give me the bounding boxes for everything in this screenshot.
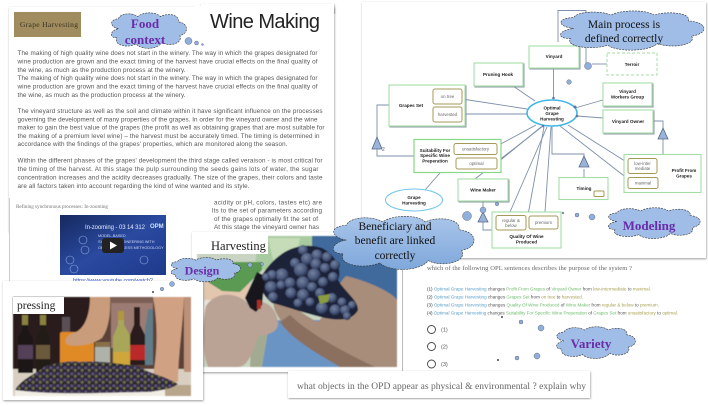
process: optimal grape harvesting [527, 100, 577, 126]
diagram links [377, 10, 663, 230]
object: profit from grapes: maximal [635, 180, 651, 186]
object: grapes set [389, 85, 465, 126]
text block: article paragraphs: of the grapes optimally fit the set of [214, 216, 318, 223]
video thumbnail [60, 215, 166, 275]
text block: article paragraphs: concentration increases and the acidity decreases gradually. The size of the grapes, their colors and taste [18, 174, 323, 182]
object: vinyard owner [603, 110, 653, 133]
heading: grape harvesting label: Grape Harvesting [20, 20, 78, 29]
object: vinyard [529, 46, 579, 68]
text block: article paragraphs: At this stage the vineyard owner has [214, 224, 319, 231]
cloud: main process is defined correctly: Main process is [588, 19, 661, 31]
object: pruning hook [474, 63, 523, 86]
harvesting image [197, 236, 397, 367]
video thumbnail: OPM [150, 224, 164, 230]
video thumbnail: In-zooming - 03 14 312 [85, 225, 146, 231]
object: quality of wine produced: Produced [516, 240, 537, 244]
object: vinyard workers group [603, 83, 652, 106]
process: optimal grape harvesting: Grape [545, 111, 559, 116]
aggregation triangles [372, 128, 668, 222]
object: quality of wine produced: regular & [502, 218, 520, 223]
object: suitability for wine preparation: Preperation [422, 158, 448, 164]
object: terroir: Terroir [625, 62, 639, 67]
small link markers [542, 97, 578, 127]
heading: video panel caption: Refining synchronous processes: In-zooming [16, 203, 108, 210]
text block: article paragraphs [16, 50, 324, 231]
OPL answer options: (3) Optimal Grape Harvesting changes Quality Of Wine Produced of Wine Maker from regular & below to premium. [427, 302, 659, 308]
radio options: (1) [441, 328, 448, 334]
object: suitability for wine preparation [414, 140, 501, 172]
process: grape harvesting: Harvesting [402, 200, 426, 206]
cloud: variety [497, 316, 635, 361]
cloud: food context: context [125, 32, 166, 47]
object: terroir [607, 53, 657, 75]
panel: OPL quiz [402, 258, 678, 373]
object: vinyard owner: Vinyard Owner [612, 119, 644, 124]
OPL answer options: (4) Optimal Grape Harvesting changes Suitability For Specific Wine Preperation of Grapes Set from unsatisfactory to optimal. [427, 310, 678, 316]
object: wine maker: Wine Maker [470, 188, 496, 192]
process: grape harvesting: Grape [407, 195, 421, 200]
cloud: food context: Food [131, 16, 160, 31]
panel: in-zooming video [9, 198, 211, 288]
cloud: food context [111, 13, 204, 48]
text block: article paragraphs: Within the different phases of the grapes' development the third stage called veraison - is most critical for [18, 158, 322, 164]
object: profit from grapes [624, 154, 701, 192]
label: harvesting: Harvesting [211, 239, 267, 253]
text block: article paragraphs: The making of high quality wine does not start in the winery. The way in which the grapes designated for [18, 50, 318, 57]
text block: article paragraphs: lts to the set of parameters according [212, 208, 322, 214]
pressing image [13, 297, 191, 396]
object: grapes set: harvested [438, 112, 458, 117]
object: suitability for wine preparation: unsatisfactory [462, 146, 490, 152]
panel: open question [288, 371, 590, 398]
video thumbnail: MODEL-BASED [98, 234, 126, 238]
text block: article paragraphs: The making of high quality wine does not start in the winery. The way in which the grapes designated for [18, 75, 318, 82]
process: optimal grape harvesting: Optimal [543, 106, 561, 110]
object: grapes set: on tree [441, 94, 455, 99]
cloud: design [152, 258, 241, 293]
object: grapes set: Grapes Set [399, 103, 424, 108]
radio options [428, 326, 448, 368]
object: quality of wine produced: Quality Of Wine [509, 234, 544, 239]
text block: article paragraphs: accordance with the findings of the grapes' properties, which are monitored along the season. [18, 141, 288, 148]
video thumbnail: SYSTEMS ENGINEERING WITH [98, 240, 155, 244]
cloud: main process is defined correctly: defined correctly [585, 33, 663, 45]
cloud: modeling: Modeling [623, 218, 676, 233]
cloud: main process is defined correctly [560, 11, 704, 84]
object: timing [559, 178, 608, 200]
label: harvesting [192, 232, 268, 254]
object: suitability for wine preparation: Suitability For [420, 148, 451, 153]
panel: pressing photo [3, 281, 203, 400]
OPL answer options: (1) Optimal Grape Harvesting changes Profit From Grapes of Vinyard Owner from low-intermediate to maximal. [427, 286, 651, 292]
text block: article paragraphs: the making of a premium level wine) – the harvest must be accurately timed. The timing is determined in [18, 133, 320, 140]
panel: OPD model diagram: 2 [382, 147, 385, 153]
object: quality of wine produced [492, 212, 561, 248]
object: profit from grapes: low-inter [634, 161, 651, 166]
radio options: (3) [441, 362, 448, 368]
text block: article paragraphs: maker to gain the best value of the grapes (the profit as well as obtaining grapes that are most suitable for [18, 124, 324, 132]
label: pressing: pressing [17, 300, 56, 312]
object: wine maker [458, 179, 508, 201]
video link: https://www.youtube.com/watch? [73, 278, 154, 284]
cloud: beneficiary and benefit are linked correctly [248, 202, 499, 269]
panel: wine making article [9, 4, 334, 232]
text block: article paragraphs: governing the development of many properties of the grapes. In order for the vineyard owner and the wine [18, 116, 318, 124]
object: quality of wine produced: below [505, 223, 518, 228]
cloud: beneficiary and benefit are linked correctly: correctly [375, 250, 416, 262]
cloud: design: Design [185, 264, 220, 278]
object: vinyard workers group: Workers Group [611, 94, 644, 100]
object: profit from grapes: Grapes [676, 174, 692, 178]
object: quality of wine produced: premium [535, 220, 552, 225]
title: wine making: Wine Making [210, 11, 320, 33]
text block: article paragraphs: wine production are grown and the exact timing of the harvest have crucial effects on the final quality of [16, 58, 318, 66]
process: grape harvesting [386, 189, 442, 211]
object: profit from grapes: Profit From [672, 168, 696, 173]
object: timing: Timing [577, 186, 592, 191]
text block: article paragraphs: are all factors taken into account regarding the kind of wine wanted and its style. [18, 183, 250, 190]
cloud: beneficiary and benefit are linked correctly: Beneficiary and [358, 221, 432, 233]
process: optimal grape harvesting: Harvesting [540, 116, 564, 122]
text block: article paragraphs: the wine, as much as the production process at the winery. [18, 67, 186, 74]
video thumbnail: OBJECT-PROCESS METHODOLOGY [98, 246, 164, 250]
OPL answer options [427, 286, 678, 316]
object: vinyard workers group: Vinyard [619, 89, 636, 94]
object: suitability for wine preparation: optimal [469, 161, 484, 166]
quiz question: which of the following OPL sentences describes the purpose of the system ? [427, 265, 632, 272]
radio options: (2) [441, 344, 448, 350]
object: vinyard: Vinyard [546, 54, 563, 59]
text block: article paragraphs: the timing of the harvest. At this stage the pulp surrounding the seeds gains lots of water, the sugar [18, 166, 318, 173]
object: pruning hook: Pruning Hook [483, 72, 513, 77]
text block: article paragraphs: acidity or pH, colors, tastes etc) are [214, 200, 322, 206]
text block: article paragraphs: wine production are grown and the exact timing of the harvest have crucial effects on the final quality of [16, 84, 318, 90]
label: pressing [13, 297, 64, 314]
text block: article paragraphs: The vineyard structure as well as the soil and climate within it have significant influence on the processes [18, 108, 322, 115]
cloud: variety: Variety [571, 336, 612, 351]
panel: harvesting photo [192, 232, 403, 372]
OPL answer options: (2) Optimal Grape Harvesting changes Grapes Set from on tree to harvested. [427, 294, 583, 300]
cloud: modeling [562, 208, 700, 239]
text block: article paragraphs: the wine, as much as the production process at the winery. [18, 92, 186, 99]
panel: OPD model diagram [362, 2, 706, 258]
object: profit from grapes: mediate [635, 166, 651, 171]
object: suitability for wine preparation: Specific Wine [420, 153, 450, 158]
panel: open question: what objects in the OPD appear as physical & environmental ? explain why [297, 382, 586, 392]
cloud: beneficiary and benefit are linked correctly: benefit are linked [355, 235, 435, 247]
heading: grape harvesting label [14, 12, 81, 37]
